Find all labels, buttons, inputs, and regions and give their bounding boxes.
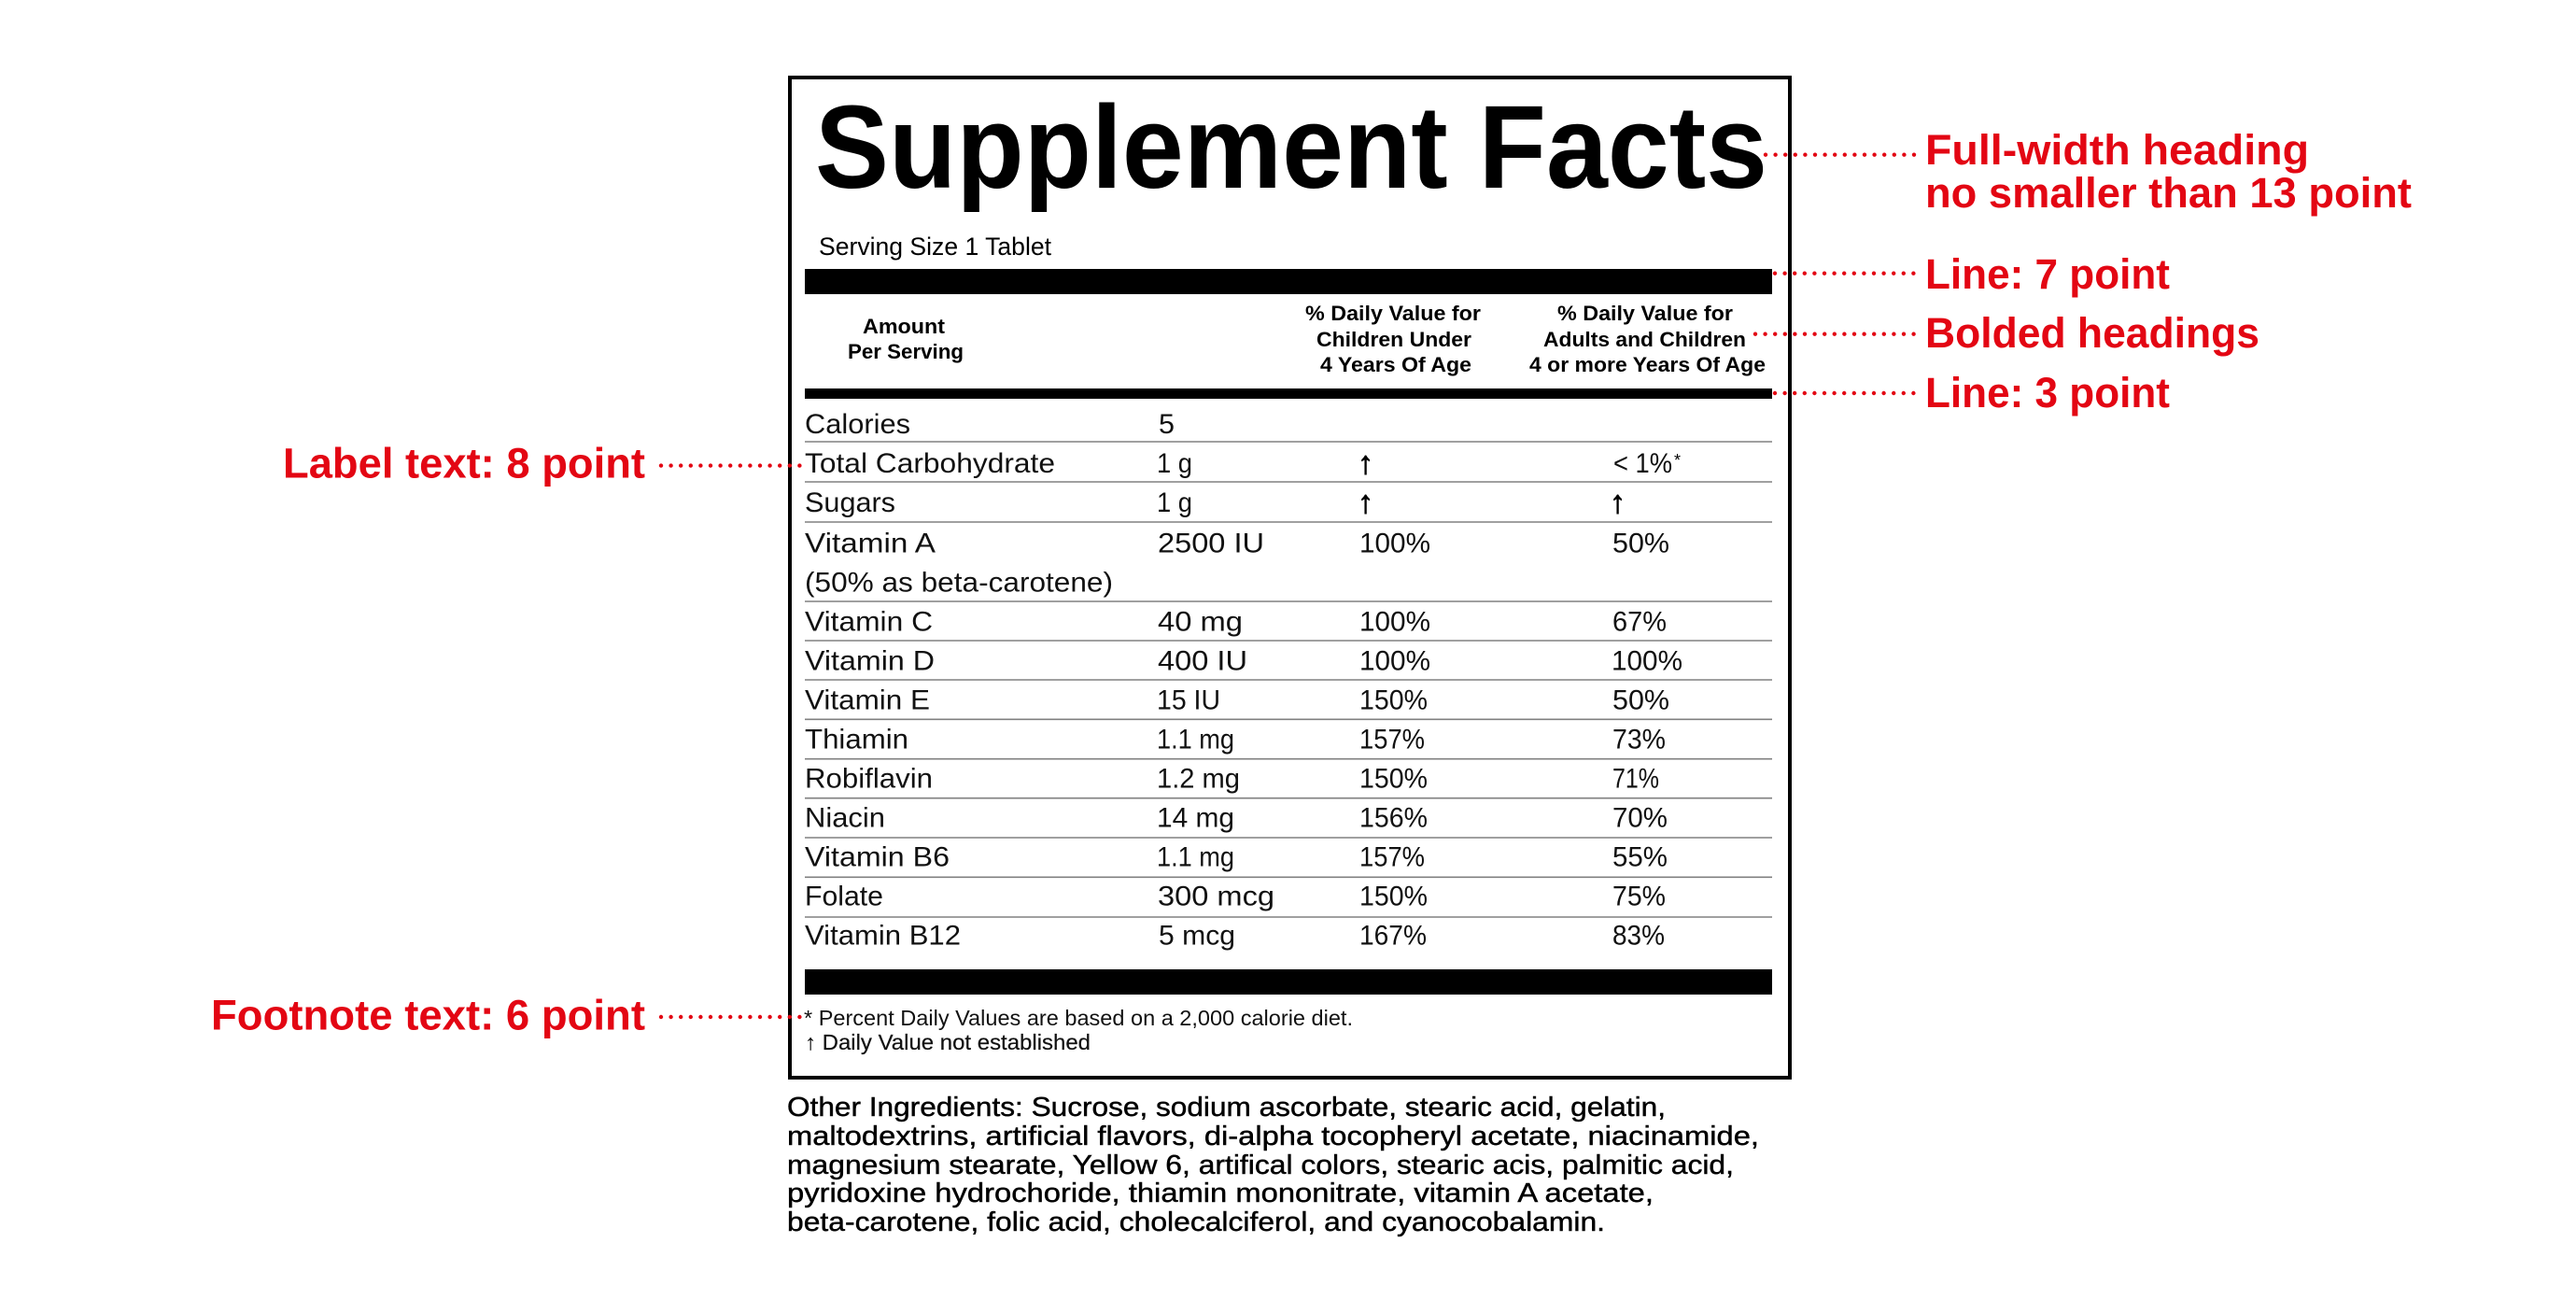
title: Supplement Facts xyxy=(815,81,1767,213)
footnotes: * Percent Daily Values are based on a 2,000 calorie diet. xyxy=(804,1006,1353,1030)
row: vitamin E: 50% xyxy=(1612,685,1669,715)
row: total carbohydrate: < 1% xyxy=(1613,448,1672,479)
row: vitamin C xyxy=(805,607,1667,638)
row: folate: 300 mcg xyxy=(1158,882,1274,911)
row: vitamin B6: 55% xyxy=(1612,842,1668,872)
row: riboflavin: 71% xyxy=(1612,764,1659,794)
row: total carbohydrate: ↑ xyxy=(1358,445,1373,481)
row: vitamin B6: 157% xyxy=(1359,842,1425,872)
panel: supplement facts label xyxy=(790,78,1790,1078)
row: folate: 75% xyxy=(1612,882,1666,911)
callout: full-width heading: Full-width heading xyxy=(1925,126,2309,174)
column headings: Children Under xyxy=(1316,328,1471,351)
callout: line 3 point: Line: 3 point xyxy=(1925,369,2170,416)
row: vitamin B12: 83% xyxy=(1612,921,1665,951)
row: vitamin B6: Vitamin B6 xyxy=(805,842,950,872)
row: calories: Calories xyxy=(805,409,910,440)
column headings: Adults and Children xyxy=(1543,328,1746,351)
row: vitamin A: 100% xyxy=(1359,529,1430,559)
row: sugars: ↑ xyxy=(1610,485,1626,520)
column headings xyxy=(848,302,1766,376)
row: vitamin B6 xyxy=(805,842,1668,872)
callout: label text 8 point: Label text: 8 point xyxy=(283,440,645,487)
column headings: 4 Years Of Age xyxy=(1320,353,1471,376)
row: vitamin C: 67% xyxy=(1612,607,1667,638)
nutrient table xyxy=(805,409,1772,951)
other ingredients text: pyridoxine hydrochoride, thiamin mononitrate, vitamin A acetate, xyxy=(787,1179,1654,1208)
row: calories xyxy=(805,409,1175,440)
row: vitamin C: Vitamin C xyxy=(805,607,933,638)
row: thiamin: Thiamin xyxy=(805,725,908,755)
row: thiamin xyxy=(805,725,1666,755)
row: calories: 5 xyxy=(1159,409,1175,440)
row: vitamin A: Vitamin A xyxy=(805,529,936,559)
row: thiamin: 157% xyxy=(1359,725,1425,755)
line: 3 point bar xyxy=(805,388,1772,399)
line: 7 point bottom bar xyxy=(805,969,1772,995)
footnotes: ↑ Daily Value not established xyxy=(805,1030,1091,1054)
callout: full-width heading: no smaller than 13 point xyxy=(1925,169,2412,217)
row: total carbohydrate xyxy=(805,445,1681,481)
other ingredients text xyxy=(787,1093,1759,1237)
serving size: Serving Size 1 Tablet xyxy=(819,233,1052,261)
other ingredients text: beta-carotene, folic acid, cholecalciferol, and cyanocobalamin. xyxy=(787,1207,1605,1237)
callout: bolded headings: Bolded headings xyxy=(1925,309,2259,357)
column headings: 4 or more Years Of Age xyxy=(1529,353,1766,376)
row: riboflavin xyxy=(805,764,1659,794)
row: niacin: 156% xyxy=(1359,803,1428,833)
callout: line 7 point: Line: 7 point xyxy=(1925,250,2170,298)
other ingredients text: Other Ingredients: Sucrose, sodium ascorbate, stearic acid, gelatin, xyxy=(787,1093,1666,1122)
row: thiamin: 1.1 mg xyxy=(1157,725,1234,755)
row: vitamin E: 150% xyxy=(1359,685,1428,715)
row: vitamin B12: 5 mcg xyxy=(1159,921,1235,951)
row: niacin: 14 mg xyxy=(1157,803,1234,833)
row: riboflavin: 150% xyxy=(1359,764,1428,794)
row: total carbohydrate: Total Carbohydrate xyxy=(805,448,1055,479)
row: riboflavin: 1.2 mg xyxy=(1157,764,1240,794)
row: vitamin A: 50% xyxy=(1612,529,1669,559)
row: vitamin E: Vitamin E xyxy=(805,685,930,715)
footnotes xyxy=(804,1006,1353,1054)
row: folate: 150% xyxy=(1359,882,1428,911)
row: sugars: 1 g xyxy=(1157,487,1192,518)
line: 7 point top bar xyxy=(805,269,1772,294)
row: sugars: ↑ xyxy=(1358,485,1373,520)
row: niacin: Niacin xyxy=(805,803,885,833)
row: sugars xyxy=(805,485,1626,520)
callout: footnote text 6 point: Footnote text: 6 point xyxy=(211,992,645,1039)
row: total carbohydrate: 1 g xyxy=(1157,448,1192,479)
row: vitamin E: 15 IU xyxy=(1157,685,1220,715)
other ingredients text: maltodextrins, artificial flavors, di-alpha tocopheryl acetate, niacinamide, xyxy=(787,1122,1759,1151)
row: vitamin C: 100% xyxy=(1359,607,1430,638)
column headings: % Daily Value for xyxy=(1557,302,1733,325)
row: vitamin B12 xyxy=(805,921,1665,951)
column headings: Amount xyxy=(863,315,946,338)
row: vitamin B6: 1.1 mg xyxy=(1157,842,1234,872)
row: vitamin A xyxy=(805,529,1669,598)
callout: full-width heading xyxy=(1766,126,2412,217)
row: vitamin C: 40 mg xyxy=(1158,607,1243,638)
row: vitamin B12: 167% xyxy=(1359,921,1427,951)
row: vitamin A: (50% as beta-carotene) xyxy=(805,568,1113,598)
row: folate xyxy=(805,882,1666,911)
row: sugars: Sugars xyxy=(805,487,895,518)
row: total carbohydrate: * xyxy=(1674,451,1681,470)
row: vitamin D: Vitamin D xyxy=(805,646,935,677)
row: niacin: 70% xyxy=(1612,803,1668,833)
row: riboflavin: Robiflavin xyxy=(805,764,933,794)
row: vitamin B12: Vitamin B12 xyxy=(805,921,961,951)
row: niacin xyxy=(805,803,1668,833)
row: thiamin: 73% xyxy=(1612,725,1666,755)
row: vitamin A: 2500 IU xyxy=(1158,529,1264,559)
row: folate: Folate xyxy=(805,882,883,911)
row: vitamin E xyxy=(805,685,1669,715)
column headings: Per Serving xyxy=(848,340,964,363)
column headings: % Daily Value for xyxy=(1305,302,1481,325)
row: vitamin D xyxy=(805,646,1682,677)
row: vitamin D: 400 IU xyxy=(1158,646,1247,677)
row: vitamin D: 100% xyxy=(1359,646,1430,677)
other ingredients text: magnesium stearate, Yellow 6, artifical colors, stearic acis, palmitic acid, xyxy=(787,1151,1734,1180)
row: vitamin D: 100% xyxy=(1612,646,1682,677)
